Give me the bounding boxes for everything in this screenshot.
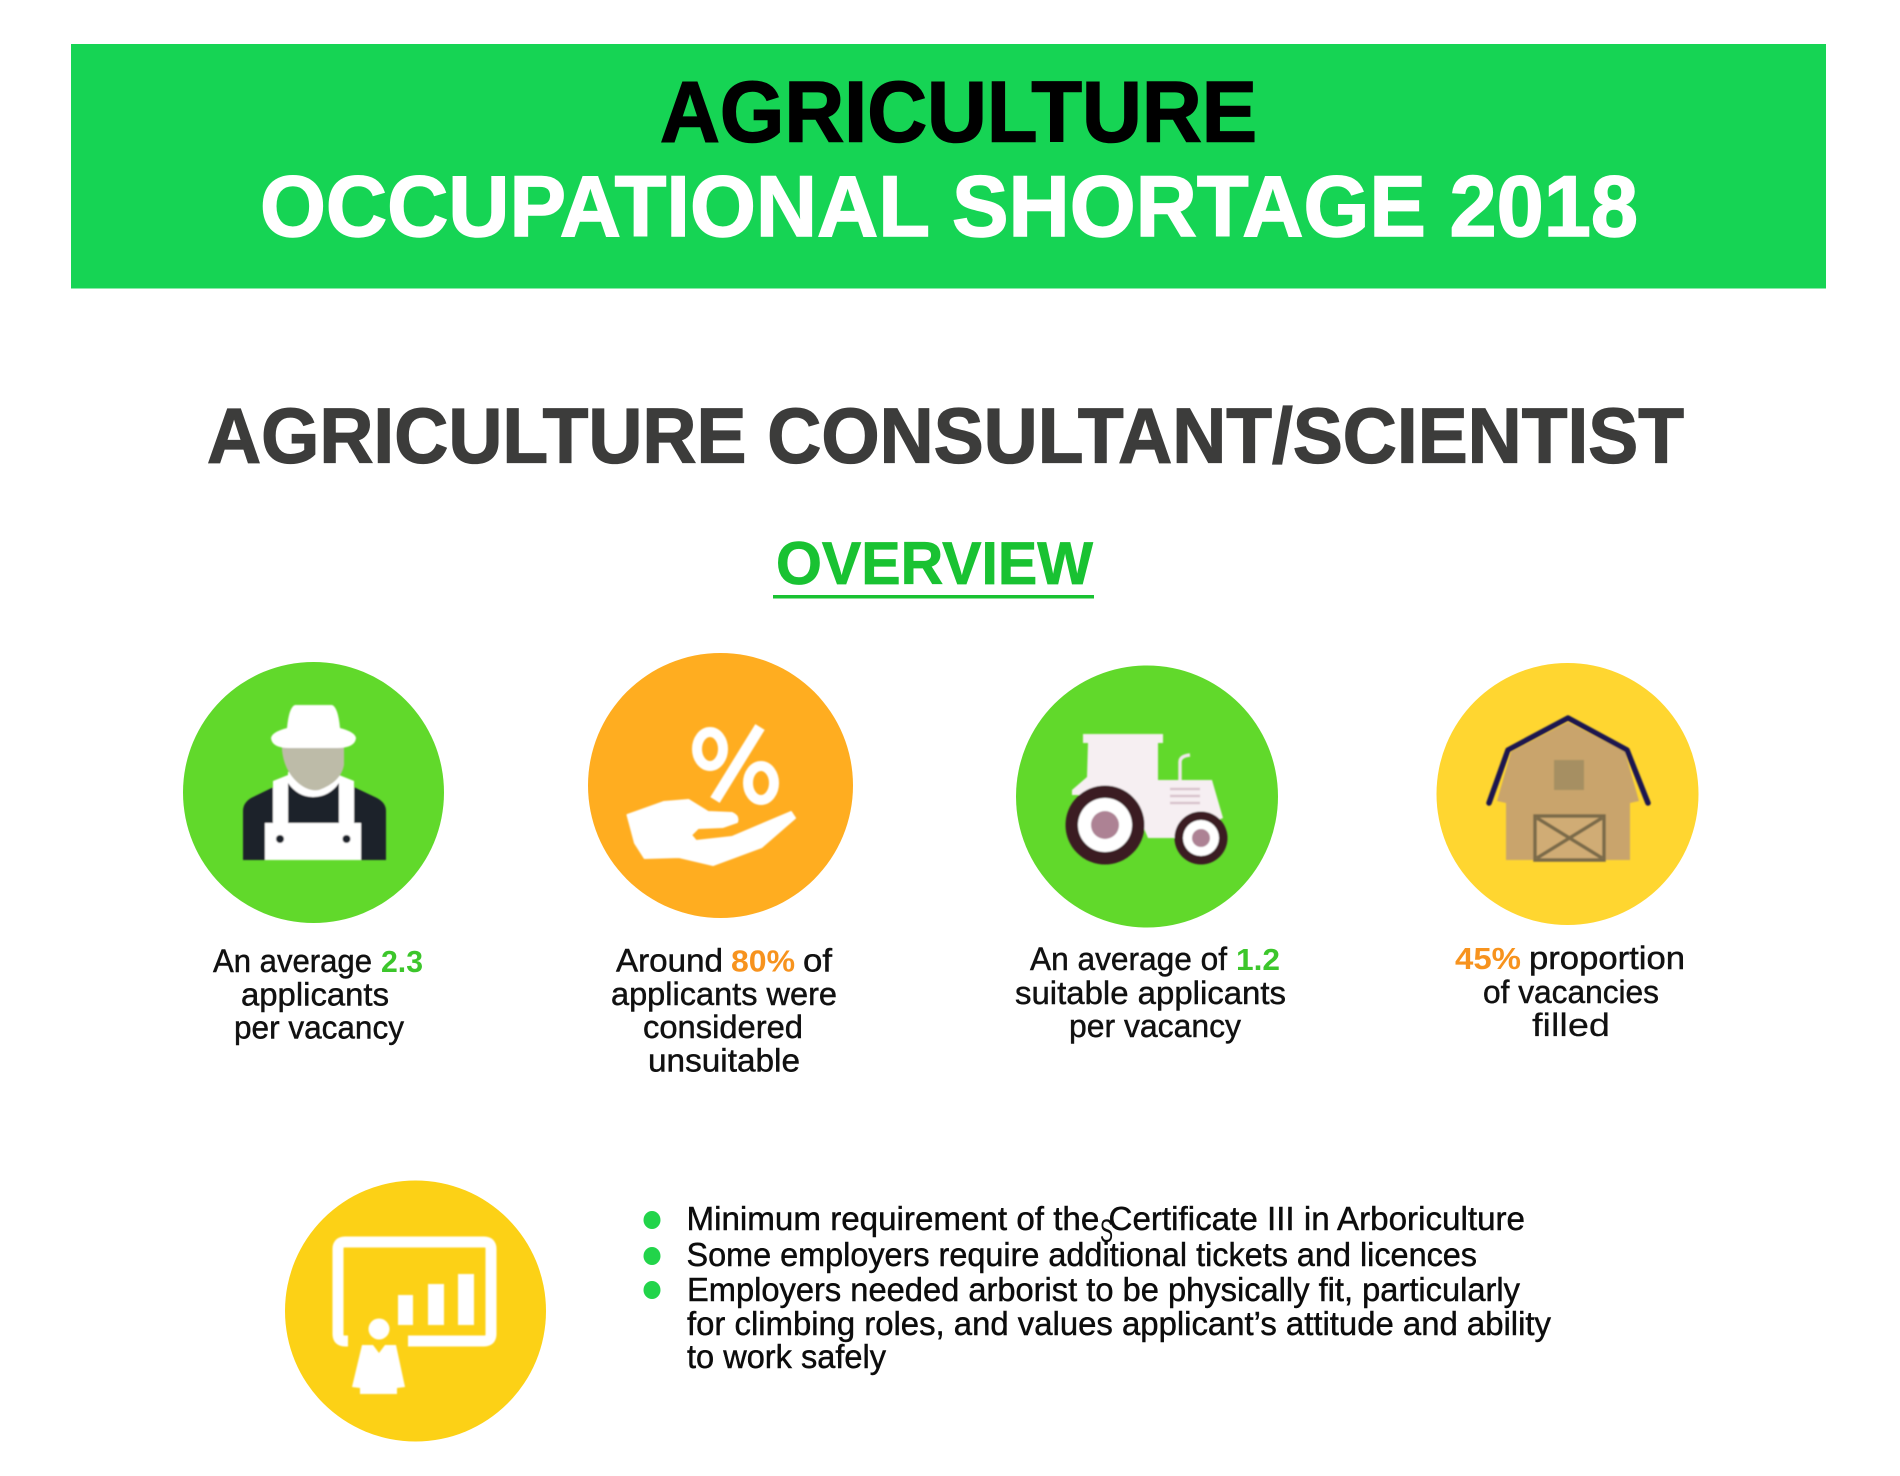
caption: unsuitable applicants — [611, 942, 837, 1078]
caption: unsuitable applicants: considered — [643, 1009, 803, 1045]
icon: presenter with chart — [285, 1180, 546, 1442]
icon: farmer — [183, 662, 444, 923]
caption: applicants per vacancy: applicants — [241, 976, 389, 1012]
caption: unsuitable applicants: of — [803, 942, 832, 978]
caption: applicants per vacancy: per vacancy — [234, 1010, 404, 1046]
caption: unsuitable applicants: unsuitable — [648, 1042, 800, 1078]
bullet item 1: Minimum requirement of the Certificate III in Arboriculture — [686, 1200, 1525, 1237]
title: agriculture: AGRICULTURE — [660, 64, 1257, 160]
caption: unsuitable applicants: Around — [616, 942, 723, 978]
caption: vacancies filled: 45% — [1455, 941, 1521, 976]
bullet item 2: Some employers require additional tickets and licences — [686, 1236, 1477, 1273]
caption: unsuitable applicants: applicants were — [611, 976, 837, 1012]
caption: suitable applicants per vacancy: suitable applicants — [1015, 975, 1286, 1011]
caption: suitable applicants per vacancy: per vacancy — [1069, 1008, 1241, 1044]
caption: vacancies filled: of vacancies — [1483, 974, 1659, 1010]
caption: suitable applicants per vacancy: 1.2 — [1236, 942, 1280, 977]
caption: suitable applicants per vacancy: An average of — [1030, 941, 1227, 977]
bullet item 3: Employers needed arborist to be physically fit, particularly — [687, 1271, 1520, 1308]
caption: vacancies filled: proportion — [1529, 940, 1685, 976]
bullet item 3: for climbing roles, and values applicant’s attitude and ability — [687, 1305, 1551, 1342]
overview heading: OVERVIEW — [776, 530, 1093, 597]
bullet item 3 — [644, 1271, 1551, 1375]
icon: barn — [1436, 663, 1698, 925]
caption: applicants per vacancy — [213, 943, 423, 1046]
requirements list — [644, 1200, 1551, 1375]
caption: unsuitable applicants: 80% — [731, 944, 795, 978]
caption: suitable applicants per vacancy — [1015, 941, 1286, 1044]
bullet item 3: to work safely — [687, 1338, 886, 1375]
header banner — [71, 44, 1826, 288]
occupation heading: AGRICULTURE CONSULTANT/SCIENTIST — [207, 392, 1684, 480]
stray letter: S — [1100, 1213, 1113, 1249]
icon: percent in hand — [588, 653, 853, 918]
caption: applicants per vacancy: 2.3 — [381, 944, 423, 979]
caption: applicants per vacancy: An average — [213, 943, 372, 979]
caption: vacancies filled — [1455, 940, 1685, 1043]
caption: vacancies filled: filled — [1532, 1007, 1610, 1043]
title: occupational shortage 2018: OCCUPATIONAL SHORTAGE 2018 — [260, 159, 1638, 255]
icon: tractor — [1016, 666, 1278, 928]
